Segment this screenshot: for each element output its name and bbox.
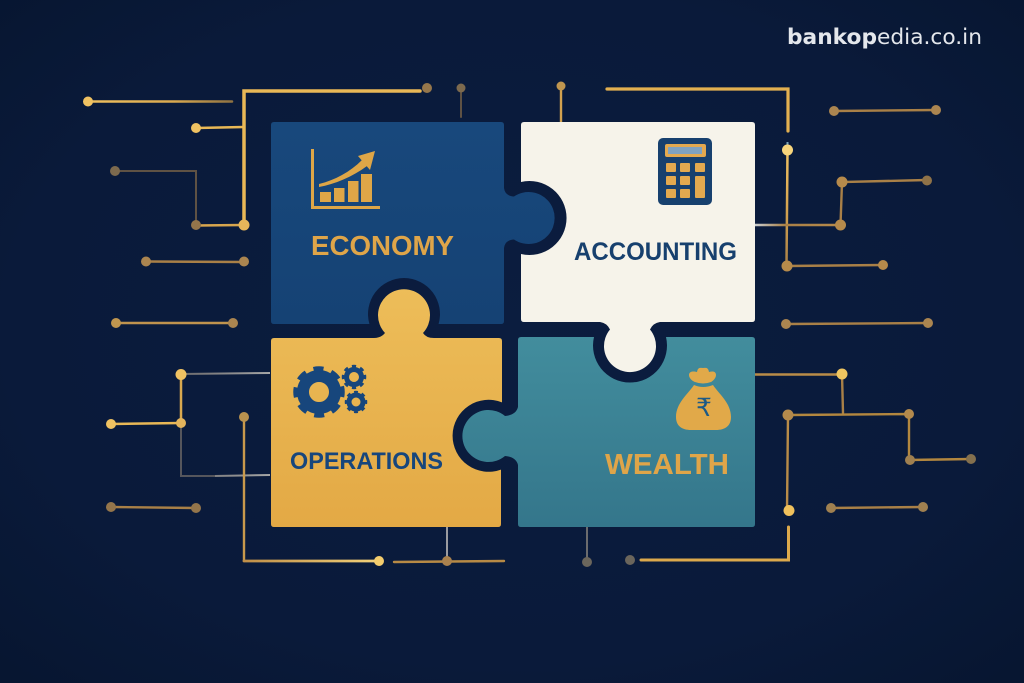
puzzle piece: wealth <box>462 337 755 527</box>
circuit lines: top left <box>83 83 466 328</box>
logo: bankopedia.co.in: bankopedia.co.in <box>787 25 982 49</box>
icon: growth chart <box>312 149 380 208</box>
label: economy: ECONOMY <box>311 230 454 261</box>
panel: operations <box>271 289 502 527</box>
puzzle piece: accounting <box>521 122 755 372</box>
puzzle piece: operations <box>271 289 502 527</box>
circuit lines: bottom left <box>106 369 504 566</box>
panel: economy <box>271 122 555 324</box>
icon: money bag with rupee <box>676 368 731 430</box>
icon: gears <box>296 366 366 415</box>
panel: accounting <box>521 122 755 372</box>
icon: calculator <box>658 138 712 205</box>
label: accounting: ACCOUNTING <box>574 238 737 266</box>
puzzle piece: economy <box>271 122 555 324</box>
panel: wealth <box>462 337 755 527</box>
circuit lines: bottom right <box>582 368 976 567</box>
label: operations: OPERATIONS <box>290 448 443 475</box>
label: wealth: WEALTH <box>605 449 729 481</box>
icon: money bag with rupee: ₹ <box>696 393 712 422</box>
circuit lines: top right <box>556 82 941 329</box>
